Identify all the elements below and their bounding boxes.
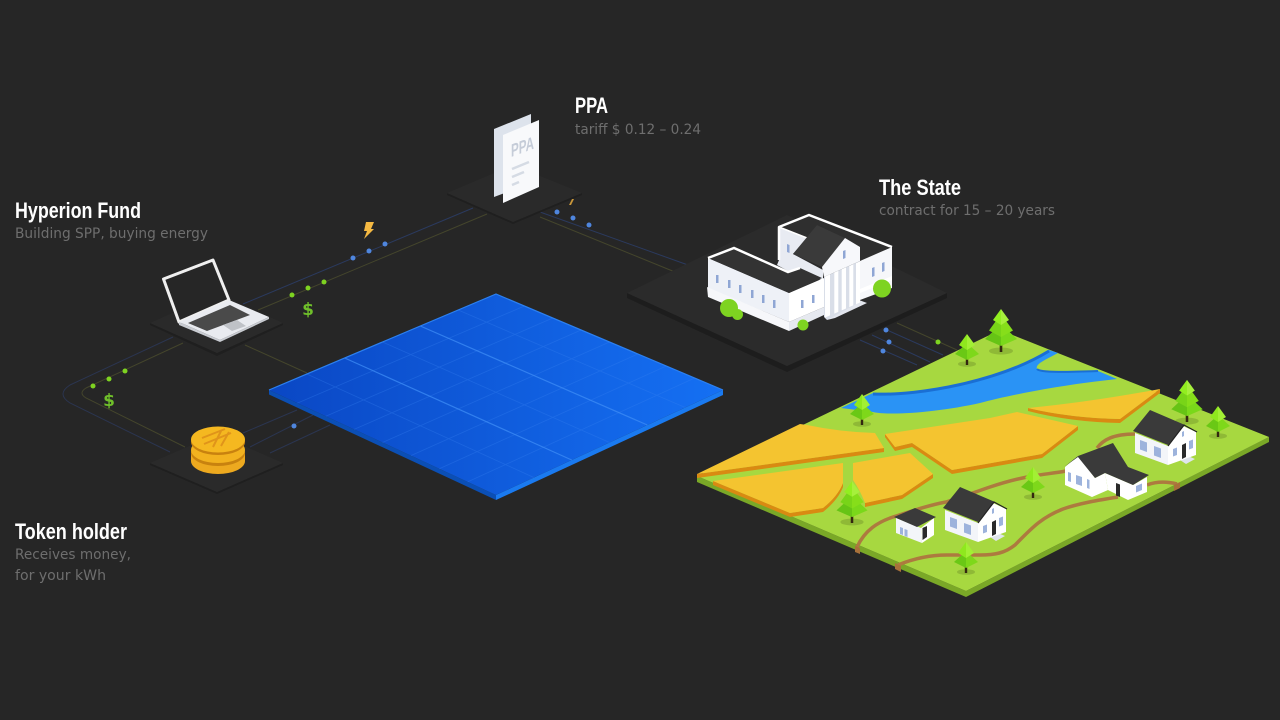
panel: token coins: [150, 426, 283, 494]
roads: [857, 434, 1177, 565]
icon: small house: [894, 508, 936, 543]
icon: tree: [1021, 467, 1045, 500]
icon: tree: [955, 334, 979, 367]
panel: laptop: [150, 260, 283, 356]
back wing: [777, 215, 892, 300]
left wing: [707, 248, 824, 331]
blue dots: [292, 210, 892, 428]
panel: state building: [627, 215, 947, 372]
icon: tree: [1171, 380, 1203, 424]
heading: The State: The State: [879, 175, 961, 200]
heading: Token holder: Token holder: [15, 519, 127, 544]
panel: PPA document: [447, 114, 582, 224]
icon: lightning bolt: [364, 222, 374, 239]
connection lines: [63, 208, 957, 453]
icon: tree: [850, 394, 874, 427]
icon: dollar sign upper: $: [302, 300, 314, 320]
icon: house: [943, 487, 1007, 542]
heading: PPA: PPA: [575, 93, 608, 118]
icon: house: [1133, 410, 1197, 465]
bushes: [720, 280, 891, 330]
icon: tree: [985, 309, 1017, 354]
land base: [697, 330, 1269, 597]
portico: [822, 238, 867, 320]
icon: house with wing: [1064, 443, 1149, 500]
heading: Hyperion Fund: Hyperion Fund: [15, 198, 141, 223]
fields: [697, 389, 1160, 517]
text: The State subtitle: contract for 15 – 20 years: [879, 203, 1055, 219]
text: Token holder subtitle: Receives money,: [15, 547, 131, 563]
road cuts on land edge: [855, 482, 1180, 572]
icon: tree: [1206, 406, 1230, 439]
river: [841, 350, 1117, 414]
green dots: [90, 280, 940, 388]
panel: landscape: [697, 309, 1269, 597]
panel: solar array: [269, 294, 723, 500]
text: Hyperion Fund subtitle: Building SPP, buying energy: [15, 226, 208, 242]
icon: dollar sign lower: $: [103, 391, 115, 411]
icon: tree: [954, 542, 978, 575]
text: Token holder subtitle second line: for your kWh: [15, 568, 106, 584]
panel: PPA document: PPA: [511, 132, 534, 161]
icon: tree: [836, 481, 868, 525]
text: PPA subtitle: tariff $ 0.12 – 0.24: [575, 122, 701, 138]
